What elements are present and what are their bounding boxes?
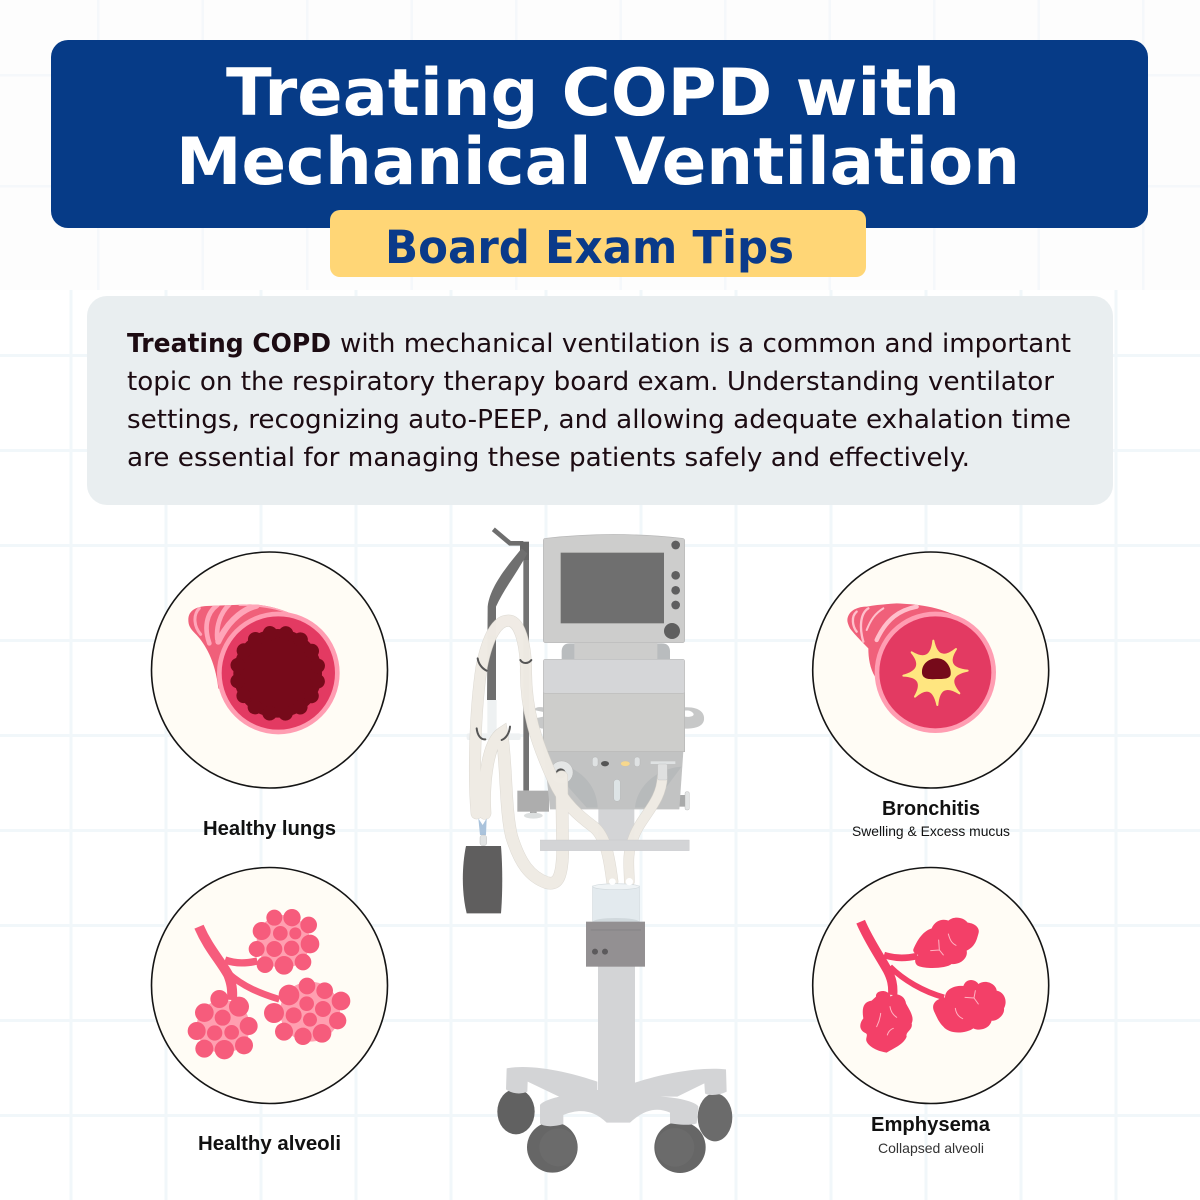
title: Mechanical Ventilation: [176, 125, 1020, 200]
icon: inflamed airway: [847, 603, 996, 733]
label: bronchitis: Bronchitis: [882, 798, 980, 820]
label: healthy lungs: Healthy lungs: [203, 818, 336, 840]
humidifier: [593, 878, 639, 926]
icon: collapsed alveoli: [860, 918, 1006, 1053]
intro text: settings, recognizing auto-PEEP, and allowing adequate exhalation time: [127, 405, 1071, 435]
panel: healthy alveoli: [152, 868, 388, 1155]
label: healthy alveoli: Healthy alveoli: [198, 1133, 341, 1155]
label: emphysema: Collapsed alveoli: [878, 1140, 984, 1156]
intro text: topic on the respiratory therapy board exam. Understanding ventilator: [127, 367, 1054, 397]
tube connector: [658, 764, 667, 780]
icon: healthy airway: [188, 604, 340, 734]
illustration: mechanical ventilator: [467, 529, 704, 883]
label: emphysema: Emphysema: [871, 1114, 991, 1136]
stand column: [598, 965, 635, 1090]
intro text: with mechanical ventilation is a common and important: [340, 329, 1071, 359]
mucus star: [903, 641, 968, 705]
breathing circuit tubes: [475, 621, 662, 883]
title: [176, 56, 1020, 200]
intro text: Treating COPD: [127, 329, 331, 359]
label: bronchitis: Swelling & Excess mucus: [852, 823, 1010, 839]
Y connector: [478, 818, 487, 846]
pole and hanger arm: [467, 529, 549, 819]
title banner: [51, 40, 1148, 228]
humidifier heater block: [586, 922, 645, 967]
icon: healthy alveoli: [188, 909, 350, 1059]
ventilator body: [543, 659, 685, 809]
intro text: are essential for managing these patients safely and effectively.: [127, 443, 970, 473]
panel: healthy lungs: [152, 552, 388, 840]
intro text panel: [87, 296, 1113, 505]
title: Treating COPD with: [226, 56, 960, 131]
wheeled base: [506, 1067, 727, 1126]
subtitle badge: Board Exam Tips: [385, 221, 794, 274]
casters: [497, 1089, 732, 1173]
neck and stand column: [562, 643, 670, 841]
monitor: [543, 534, 685, 643]
label: bronchitis: [852, 798, 1010, 839]
intro text: [127, 329, 1071, 473]
panel: emphysema: [813, 868, 1049, 1156]
panel: bronchitis: [813, 552, 1049, 839]
shelf: [540, 840, 689, 851]
label: emphysema: [871, 1114, 991, 1156]
illustration: ventilator stand and accessories: [463, 846, 732, 1173]
subtitle badge: [330, 210, 866, 277]
ventilator side handles: [534, 707, 704, 810]
test lung bag: [463, 846, 502, 913]
